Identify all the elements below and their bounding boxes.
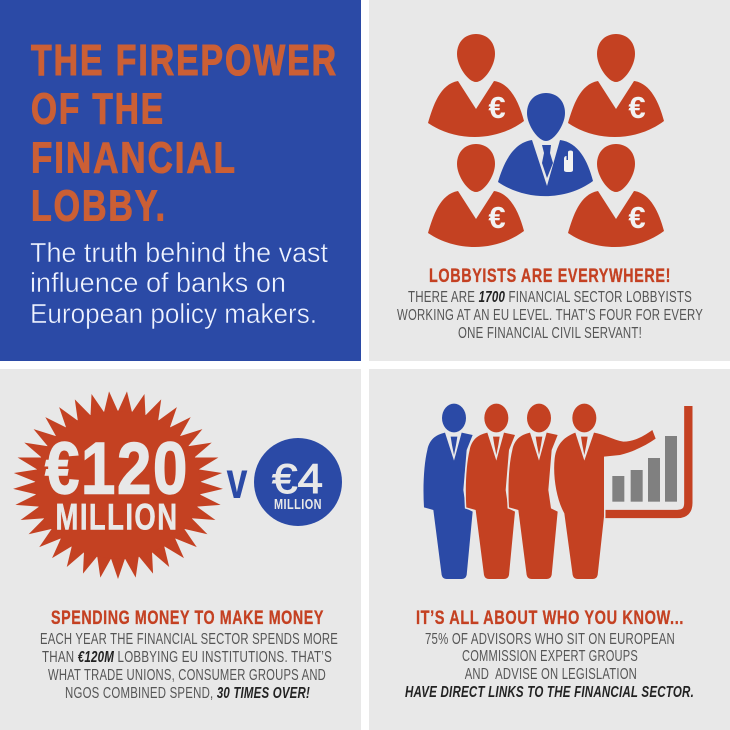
text: who you know: AND ADVISE ON LEGISLATION [462, 666, 637, 683]
versus label: v [226, 452, 248, 510]
starburst: €120 million: €120 [45, 428, 189, 510]
subtitle: European policy makers. [30, 298, 317, 329]
figure: red advisor two [466, 404, 515, 579]
title heading: LOBBY. [31, 182, 167, 230]
text: who you know [405, 608, 694, 701]
text: lobbyists are everywhere: ONE FINANCIAL CIVIL SERVANT! [458, 325, 642, 342]
title heading: FINANCIAL [31, 134, 237, 182]
icon: lobbyist top left [428, 34, 524, 137]
icon: chart and advisors [423, 404, 688, 579]
circle: €4 million: MILLION [274, 497, 322, 513]
panel: title [0, 0, 361, 361]
title heading [31, 37, 338, 230]
title heading: OF THE [31, 86, 165, 134]
text: spending money: THAN €120M LOBBYING EU INSTITUTIONS. THAT’S [42, 649, 332, 666]
circle: €4 million [254, 438, 342, 526]
starburst: €120 million [13, 391, 223, 579]
icon: lobbyist bottom right: € [628, 200, 646, 235]
title heading: THE FIREPOWER [31, 37, 338, 85]
text: spending money: NGOS COMBINED SPEND, 30 TIMES OVER! [65, 685, 310, 702]
figure: red advisor presenting [554, 404, 656, 579]
text: spending money: WHAT TRADE UNIONS, CONSUMER GROUPS AND [48, 667, 326, 684]
chart [600, 406, 688, 514]
icon: lobbyist bottom left [428, 144, 524, 247]
subtitle [30, 237, 328, 329]
panel: spending [0, 369, 361, 730]
subtitle: The truth behind the vast [30, 237, 328, 268]
text: lobbyists are everywhere [397, 266, 703, 342]
panel: lobbyists [369, 0, 730, 361]
figure: blue advisor [423, 404, 473, 579]
panel: advisors [369, 369, 730, 730]
text: who you know: COMMISSION EXPERT GROUPS [462, 648, 638, 665]
text: spending money: SPENDING MONEY TO MAKE MONEY [51, 608, 324, 629]
icon: lobbyist top right: € [628, 90, 646, 125]
starburst: €120 million: MILLION [56, 496, 178, 538]
text: spending money: EACH YEAR THE FINANCIAL SECTOR SPENDS MORE [40, 631, 338, 648]
icon: lobbyist top left: € [488, 90, 506, 125]
circle: €4 million: €4 [272, 455, 323, 502]
subtitle: influence of banks on [30, 267, 286, 298]
text: spending money [40, 608, 338, 702]
icon: lobbyist bottom left: € [488, 200, 506, 235]
icon: lobbyist top right [568, 34, 664, 137]
icon: lobbyist bottom right [568, 144, 664, 247]
icon: civil servant [498, 93, 593, 196]
figure: red advisor three [508, 404, 558, 579]
